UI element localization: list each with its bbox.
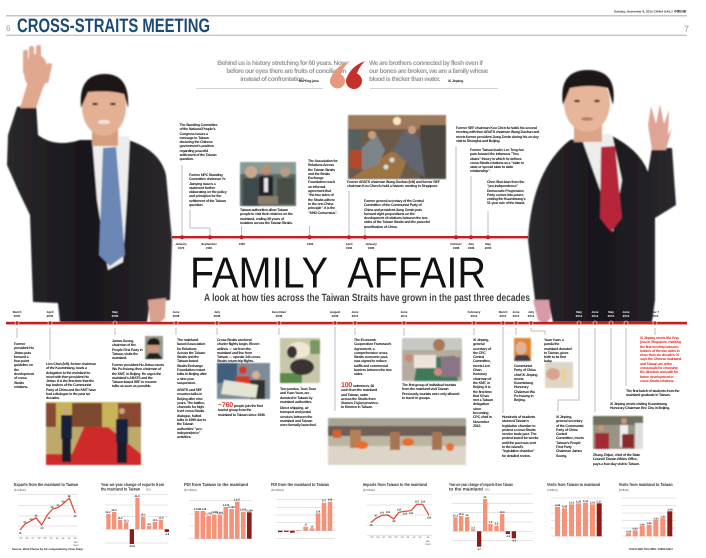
chart: imports from Taiwan to the mainland: 10 [401,536,404,539]
lower timeline 2005-2015: 2011 [401,314,408,318]
chart: FDI from the mainland to Taiwan: 298 [328,499,333,502]
chart: imports from Taiwan to the mainland: 13 [419,536,422,539]
chart: visits from Taiwan to mainland [547,482,604,536]
chart: FDI from Taiwan to the mainland: 1,881 [217,512,224,515]
chart: imports from Taiwan to the mainland: 124 [403,512,408,516]
chart: imports from Taiwan to the mainland: 07 [383,536,386,539]
chart: exports from the mainland to Taiwan: 10 [50,537,53,540]
right quote: our bones are broken, we are a family whose [369,68,488,75]
chart: exports from the mainland to Taiwan: 21 [24,521,27,524]
chart: year-on-year change of imports: -17 [477,548,481,551]
chart: visits from Taiwan to mainland: (million) [547,488,558,492]
chart: year-on-year change of imports: (%) [485,488,490,492]
chart: year-on-year change of exports: 10.3 [123,520,129,522]
lower timeline 2005-2015: July [528,310,534,314]
upper timeline 1979-2000: 1987 [239,242,246,246]
lower timeline 2005-2015: 2008 [276,314,283,318]
photo: ARATS and SEF handshake [348,115,446,179]
chart: year-on-year change of imports: 16.6 [458,513,464,516]
chart: exports from the mainland to Taiwan: 12 [62,537,65,540]
text: 1981 Ye Jianying: Former NPC Standing Committee chairman Ye Jianying issues a statement further elaborating on the policy and principles for the settlement of the Taiwan question. [189,173,227,207]
lower timeline 2005-2015: 2009 [332,314,339,318]
chart: FDI from the mainland to Taiwan: 277 [322,500,327,503]
chart: year-on-year change of exports: (%) [146,488,151,492]
upper timeline 1979-2000: 1993 [346,246,353,250]
chart: exports from the mainland to Taiwan: Exports from the mainland to Taiwan [14,482,78,487]
chart: imports from Taiwan to the mainland: 157 [415,500,420,504]
text: student protest: Hundreds of students stormed Taiwan's legislative chamber to protest a cross-Straits service trade pact. The protest lasted for weeks until the pact was sent to the island's "legislative chamber" for detailed review. [502,415,538,458]
right quote [369,60,488,83]
lower timeline 2005-2015: 2013 [528,314,535,318]
upper timeline 1979-2000: 1981 [206,246,213,250]
chart: visits from mainland to Taiwan: 4.06 [667,508,673,512]
chart: year-on-year change of exports [101,482,170,548]
chart: visits from Taiwan to mainland: 5.37 [596,500,602,504]
chart: year-on-year change of exports: the mainland to Taiwan [101,486,140,492]
lower timeline 2005-2015: 2013 [500,314,507,318]
chart: exports from the mainland to Taiwan: 23 [30,518,33,521]
upper timeline 1979-2000: 1992 [307,242,314,246]
chart: year-on-year change of imports: 5.8 [495,523,499,526]
chart: year-on-year change of imports: Year-on-year change of imports from Taiwan [449,482,513,487]
chart: imports from Taiwan to the mainland: 09 [395,536,398,539]
chart: year-on-year change of exports: Year-on-year change of exports from [101,482,164,487]
main headline: FAMILY AFFAIR [190,250,486,298]
chart: imports from Taiwan to the mainland: 100 [427,516,432,520]
chart: visits from mainland to Taiwan [619,482,676,551]
chart: exports from the mainland to Taiwan: 37 [57,504,60,507]
upper timeline 1979-2000: 1999 [468,246,475,250]
text: April 2005 Lien Chan: Lien Chan (left), former chairman of the Kuomintang, leads a delegation to the mainland to meet with then president Hu Jintao. It is the first time that the top leaders of the Communist Party of China and the KMT have had a dialogue in the past six decades. [46,362,96,400]
chart: imports from Taiwan to the mainland: 86 [393,520,396,523]
chart: year-on-year change of exports: 10.5 [152,519,158,522]
lower timeline 2005-2015: December [272,310,287,314]
chart: FDI from Taiwan to the mainland: 3,017 [234,499,241,502]
chart: year-on-year change of exports: 18.2 [140,514,146,517]
chart: exports from the mainland to Taiwan: 35 [51,506,54,509]
chart: exports from the mainland to Taiwan: Jan- [73,541,79,544]
lower timeline 2005-2015: 2008 [214,314,221,318]
chart: visits from mainland to Taiwan: 1.66 [639,523,645,526]
chart: FDI from the mainland to Taiwan: FDI from the mainland to Taiwan [271,482,329,487]
lower timeline 2005-2015: June [591,310,599,314]
chart: visits from mainland to Taiwan: Visits from mainland to Taiwan [619,482,673,487]
chart: imports from Taiwan to the mainland: 11 [407,536,410,539]
text: 1995 Jiang Zemin: Former general secretary of the Central Committee of the Communist Party of China and president Jiang Zemin puts forward eight propositions on the development of relations between the two sides of the Taiwan Straits and the peaceful reunification of China. [364,199,430,229]
chart: imports from Taiwan to the mainland: Imports from Taiwan to the mainland [363,482,427,487]
text: March 2005: Former president Hu Jintao puts forward a four-point guideline on the development of cross-Straits relations. [14,342,34,389]
left quote attribution: Ma Ying-jeou [299,79,319,83]
chart: FDI from Taiwan to the mainland: 2,136 [200,508,207,511]
photo: swimmers [328,418,466,465]
lower timeline 2005-2015: 2012 [471,314,478,318]
chart: visits from Taiwan to mainland: 5.26 [576,500,582,504]
photo: Zhang Zhijun in Taiwan [593,416,643,449]
lower timeline 2005-2015: 2014 [592,314,599,318]
text: July 2008 flights: Cross-Straits weekend charter flights begin. Eleven airlines — six from the mainland and five from Taiwan — operate 144 cross-Straits return-trip flights. [217,338,261,363]
text: February 2013 Xi and Lien: Xi Jinping, general secretary of the CPC Central Committee, meets Lien Chan, honorary chairman of the KMT, in Beijing. It is the first time that Xi has met a Taiwan delegation since becoming CPC chief in November 2012. [473,338,493,428]
left quote: Behind us is history stretching for 60 years. Now [217,60,346,67]
photo: Lien Chan and Hu Jintao on red carpet [46,402,141,465]
chart: imports from Taiwan to the mainland: 103 [386,511,391,514]
lower timeline 2005-2015: 2005 [47,314,54,318]
chart: imports from Taiwan to the mainland: 101 [380,512,385,514]
right quote: We are brothers connected by flesh even if [369,60,482,67]
figure: Ma Ying-jeou waving [7,45,172,324]
chart: visits from Taiwan to mainland: 4.48 [562,506,568,508]
chart: exports from the mainland to Taiwan: 11 [56,537,59,540]
chart: visits from mainland to Taiwan: 2.63 [653,517,659,520]
text: 1979 message: The Standing Committee of the National People's Congress issues a message to Taiwan declaring the Chinese government's position regarding peaceful settlement of the Taiwan question. [180,123,217,161]
chart: exports from the mainland to Taiwan: 07 [32,537,35,540]
chart: imports from Taiwan to the mainland: ($ billion) [363,488,375,492]
chart: year-on-year change of imports: 19.8 [499,511,505,514]
chart: visits from mainland to Taiwan: (million) [619,488,629,492]
chart: exports from the mainland to Taiwan: 28 [48,517,51,520]
chart: FDI from Taiwan to the mainland: 2,475 [223,504,230,507]
chart: year-on-year change of exports: 44.9 [134,495,140,498]
chart: FDI from Taiwan to the mainland: ($ million) [184,488,197,492]
right quote attribution: Xi Jinping [448,79,463,83]
text: 100 swimmers: 100 swimmers, 60 each from the mainland and Taiwan, swim across the Straits from Xiamen, Fujian province, to Kinmen in Taiwan. [341,382,379,409]
figure: Xi Jinping waving [528,70,676,324]
chart: visits from mainland to Taiwan: 0.80 [632,528,638,530]
text: Zhang Zhijun: Zhang Zhijun, chief of the State Council Taiwan Affairs Office, pays a four-day visit to Taiwan. [593,453,640,466]
chart: imports from Taiwan to the mainland: 06 [377,536,380,539]
text: 1999 Lee Teng-hui: Former Taiwan leader Lee Teng-hui puts forward the infamous "Two states" theory in which he defines cross-Straits relations as a "state to state or special state to state relationship". [470,148,524,173]
chart: FDI from the mainland to Taiwan: 37 [305,524,308,526]
chart: exports from the mainland to Taiwan: Sept [73,544,79,547]
chart: visits from Taiwan to mainland: 5.16 [590,502,596,504]
chart: FDI from Taiwan to the mainland: 2,152 [194,508,201,511]
chart: visits from Taiwan to mainland: 4.39 [555,504,561,507]
header rules and page title: 7 [684,24,689,34]
chart: visits from mainland to Taiwan: 0.28 [626,530,632,534]
upper timeline 1979-2000: July [468,242,474,246]
chart: year-on-year change of imports: 15.2 [453,514,459,517]
lower timeline 2005-2015: 2005 [14,314,21,318]
chart: FDI from Taiwan to the mainland: FDI from Taiwan to the mainland [184,482,248,487]
chart: year-on-year change of imports: to the mainland [449,486,483,492]
upper timeline 1979-2000: 1995 [368,246,375,250]
chart: exports from the mainland to Taiwan [12,482,83,551]
chart: visits from Taiwan to mainland: 5.34 [583,500,589,503]
chart: FDI from the mainland to Taiwan: 176 [316,510,321,513]
chart: imports from Taiwan to the mainland: 152 [421,500,426,504]
upper timeline 1979-2000: April [346,242,353,246]
chart: FDI from Taiwan to the mainland [184,482,253,539]
lower timeline 2005-2015: June [400,310,408,314]
chart: FDI from Taiwan to the mainland: 1,776 [205,513,212,516]
chart: year-on-year change of exports: 13.8 [158,517,164,520]
text: Xi and Wu: Communist Party of China chief Xi Jinping meets Kuomintang Honorary Chairman Wu Po-hsiung in Beijing. [514,364,537,402]
left quote [217,60,346,83]
chart: imports from Taiwan to the mainland: 14 [427,536,430,539]
lower timeline 2005-2015: June [351,310,359,314]
lower timeline 2005-2015: February [468,310,481,314]
lower timeline 2005-2015 [6,310,687,413]
chart: exports from the mainland to Taiwan: 13 [68,537,71,540]
chart: exports from the mainland to Taiwan: Source: Wind Photos by AP, composited by Chou Ruiqi [12,548,83,551]
upper timeline 1979-2000: September [201,242,218,246]
chart: year-on-year change of exports: -30.8 [129,545,136,548]
upper timeline 1979-2000: 2000 [485,246,492,250]
text: 1987 relatives: Taiwan authorities allow Taiwan people to visit their relatives on the mainland, ending 38 years of isolation across the Taiwan Straits. [240,208,293,225]
lower timeline 2005-2015: April [47,310,54,314]
header rules and page title: 6 [6,24,11,33]
lower timeline 2005-2015: March [13,310,22,314]
text: Yuan Yuan baby: Yuan Yuan, a panda the mainland donated to Taiwan, gives birth to its first baby. [544,338,572,363]
chart: year-on-year change of imports [449,482,533,551]
text: pandas: Two pandas, Tuan Tuan and Yuan Yuan, are donated to Taiwan by mainland authorities. [280,387,316,404]
chart: year-on-year change of imports: 16 [466,514,469,517]
chart: year-on-year change of exports: 4.8 [147,523,151,526]
lower timeline 2005-2015: 2008 [173,314,180,318]
chart: year-on-year change of imports: 2.3 [471,526,475,529]
chart: imports from Taiwan to the mainland: Sept [425,543,431,546]
header rules and page title: CROSS-STRAITS MEETING [17,15,210,37]
chart: visits from mainland to Taiwan: TIAN ZI AND YOU ZHOU / CHINA DAILY [629,547,673,551]
lower timeline 2005-2015: May [112,310,118,314]
text: 760 tourists: ~760 people join the first tourist group from the mainland to Taiwan since 1949. [218,402,265,417]
lower timeline 2005-2015: 2010 [352,314,359,318]
chart: imports from Taiwan to the mainland: 116 [397,508,402,512]
lower timeline 2005-2015: 2005 [112,314,119,318]
photo: James Soong portrait [145,336,163,359]
upper timeline 1979-2000: January [175,242,187,246]
chart: FDI from Taiwan to the mainland: 2,405 [240,509,247,512]
chart: imports from Taiwan to the mainland: 08 [389,536,392,539]
text: ECFA: The Economic Cooperation Framework Agreement, a comprehensive cross-Straits economic pact, was signed to reduce tariffs and commercial barriers between the two sides. [354,338,392,376]
chart: year-on-year change of exports: 22.2 [105,511,111,514]
chart: visits from Taiwan to mainland: Visits from Taiwan to mainland [547,482,600,487]
text: Xi and Soong: Xi Jinping, general secretary of the Communist Party of China Central Committee, meets Taiwan's People First Party Chairman James Soong. [556,415,584,458]
chart: year-on-year change of imports: 35 [484,496,487,499]
chart: imports from Taiwan to the mainland: 132 [409,512,414,515]
chart: exports from the mainland to Taiwan: 20 [41,527,44,530]
text: 1998 Koo Chen-fu: Former SEF chairman Koo Chen-fu holds his second meeting with then ARATS chairman Wang Daohan and meets former president Jiang Zemin during his on-day visit to Shanghai and Beijing. [456,126,539,143]
chart: exports from the mainland to Taiwan: 09 [44,537,47,540]
chart: exports from the mainland to Taiwan: 14 [74,537,77,540]
text: individual tourists: The first group of individual tourists from the mainland visit Taiwan. Previously, tourists were only allowed to travel in groups. [402,383,459,400]
chart: year-on-year change of exports: 13.2 [117,517,123,520]
left quote: before our eyes there are fruits of conciliation [226,68,346,75]
chart: year-on-year change of imports: 7.9 [489,521,493,524]
text: May 2005 James Soong: James Soong, chairman of the People First Party in Taiwan, visits the mainland. [112,339,143,360]
lower timeline 2005-2015: May [576,310,582,314]
lower timeline 2005-2015: 2014 [576,314,583,318]
photo: baby panda [545,362,573,388]
text: 2000 Chen Shui-bian: Chen Shui-bian from the "pro-independence" Democratic Progressive Party comes into power, ending the Kuomintang's 51-year rule of the island. [487,180,525,205]
chart: imports from Taiwan to the mainland [363,482,432,546]
text: 1992 consensus: The Association for Relations Across the Taiwan Straits and the Straits Exchange Foundation reach an informal agreement that "the two sides of the Straits adhere to the one-China principle". It is the "1992 Consensus". [308,159,338,215]
chart: exports from the mainland to Taiwan: 33 [74,515,77,518]
chart: visits from mainland to Taiwan: 2.85 [660,515,666,518]
chart: exports from the mainland to Taiwan: 26 [35,514,38,518]
upper timeline 1979-2000: January [365,242,377,246]
chart: year-on-year change of imports: -2.8 [506,535,511,538]
right quote: blood is thicker than water. [369,76,440,83]
text: Wu Po-hsiung meeting: Former president Hu Jintao meets Wu Po-hsiung, then chairman of the KMT, in Beijing. He urges the mainland's ARATS and the Taiwan-based SEF to resume talks as soon as possible. [112,363,164,388]
chart: exports from the mainland to Taiwan: 46 [68,495,71,498]
chart: year-on-year change of imports: -8.3 [512,540,517,542]
photo: Taiwan visitors 1987 [240,162,296,206]
chart: FDI from the mainland to Taiwan: ($ million) [271,488,284,492]
chart: year-on-year change of exports: 25.0 [111,509,117,512]
header rules and page title [6,10,689,37]
photo: pandas [280,338,320,383]
lower timeline 2005-2015: June [172,310,180,314]
text: direct links: Direct shipping, air transport and postal services between the mainland and Taiwan were formally launched. [280,406,316,427]
text: Xi-Ma meeting in red: Xi Jinping meets Ma Ying-jeou in Singapore, marking the first meeting between leaders of the two sides in more than six decades. Xi says the Chinese mainland and Taiwan are at the crossroads for choosing the direction and path for future development in cross-Straits relations. [640,336,681,383]
lower timeline 2005-2015: March [499,310,508,314]
chart: exports from the mainland to Taiwan: 08 [38,537,41,540]
upper timeline 1979-2000: 1979 [178,246,185,250]
lower timeline 2005-2015: August [330,310,340,314]
chart: visits from mainland to Taiwan: 1.85 [646,522,652,525]
chart: exports from the mainland to Taiwan: 06 [26,537,29,540]
chart: imports from Taiwan to the mainland: 05 [371,536,374,539]
chart: FDI from the mainland to Taiwan [271,482,335,538]
chart: imports from Taiwan to the mainland: 87 [375,514,378,518]
lower timeline 2005-2015: June [622,310,630,314]
upper timeline 1979-2000 [172,146,528,250]
chart: exports from the mainland to Taiwan: 05 [20,537,23,540]
chart: imports from Taiwan to the mainland: 75 [370,524,373,527]
chart: imports from Taiwan to the mainland: 12 [413,536,416,539]
chart: FDI from Taiwan to the mainland: 1,898 [211,511,218,514]
text: Xi meets Chu: Xi Jinping meets visiting Kuomintang Honorary Chairman Eric Chu in Beijing. [610,402,670,410]
subtitle: A look at how ties across the Taiwan Straits have grown in the past three decades [204,292,530,304]
chart: exports from the mainland to Taiwan: 16 [19,532,22,535]
lower timeline 2005-2015: 2013 [513,314,520,318]
chart: FDI from the mainland to Taiwan: 15 [311,525,314,528]
lower timeline 2005-2015: 2015 [652,314,659,318]
chart: exports from the mainland to Taiwan: ($ billion) [14,488,26,492]
upper timeline 1979-2000: October [450,242,463,246]
chart: FDI from Taiwan to the mainland: 2,183 [228,506,235,509]
text: ARATS and SEF: ARATS and SEF resumes talks in Beijing after nine years. The battles, channels for high-level cross-Straits dialogue, halted talks in 1999 due to the Taiwan authorities' "pro-independence" activities. [177,388,206,439]
chart: year-on-year change of exports: -2.8 [165,533,170,536]
lower timeline 2005-2015: 2015 [623,314,630,318]
text: student graduates: The first batch of students from the mainland graduate in Taiwan. [626,389,679,397]
lower timeline 2005-2015: 2015 [608,314,615,318]
lower timeline 2005-2015: July [214,310,220,314]
chart: exports from the mainland to Taiwan: 40 [62,500,65,504]
upper timeline 1979-2000: May [485,242,491,246]
chart: visits from Taiwan to mainland: 5.14 [569,502,575,504]
lower timeline 2005-2015: May [608,310,614,314]
left quote: instead of confrontation. [240,76,305,83]
photo: Wu Po-hsiung portrait [514,338,531,361]
photo: tourists with a map [217,363,270,399]
chart: FDI from Taiwan to the mainland: 2,359 [246,509,253,512]
upper timeline 1979-2000: 1998 [453,246,460,250]
photo: tourist holding permit [402,338,462,381]
lower timeline 2005-2015: June [512,310,520,314]
lower timeline 2005-2015: Nov 7 [651,310,659,314]
text: June 2008 talks: The mainland-based Association for Relations Across the Taiwan Straits and the Taiwan-based Straits Exchange Foundation restart talks in Beijing after a nine-year suspension. [177,338,207,385]
chart: imports from Taiwan to the mainland: Jan- [425,540,431,543]
header rules and page title: Sunday, November 8, 2015 CHINA DAILY 中国日报 [614,10,687,14]
text: 1993 Singapore caption: Former ARATS chairman Wang Daohan (left) and former SEF chairman Koo Chen-fu hold a historic meeting in Singapore. [347,180,440,188]
